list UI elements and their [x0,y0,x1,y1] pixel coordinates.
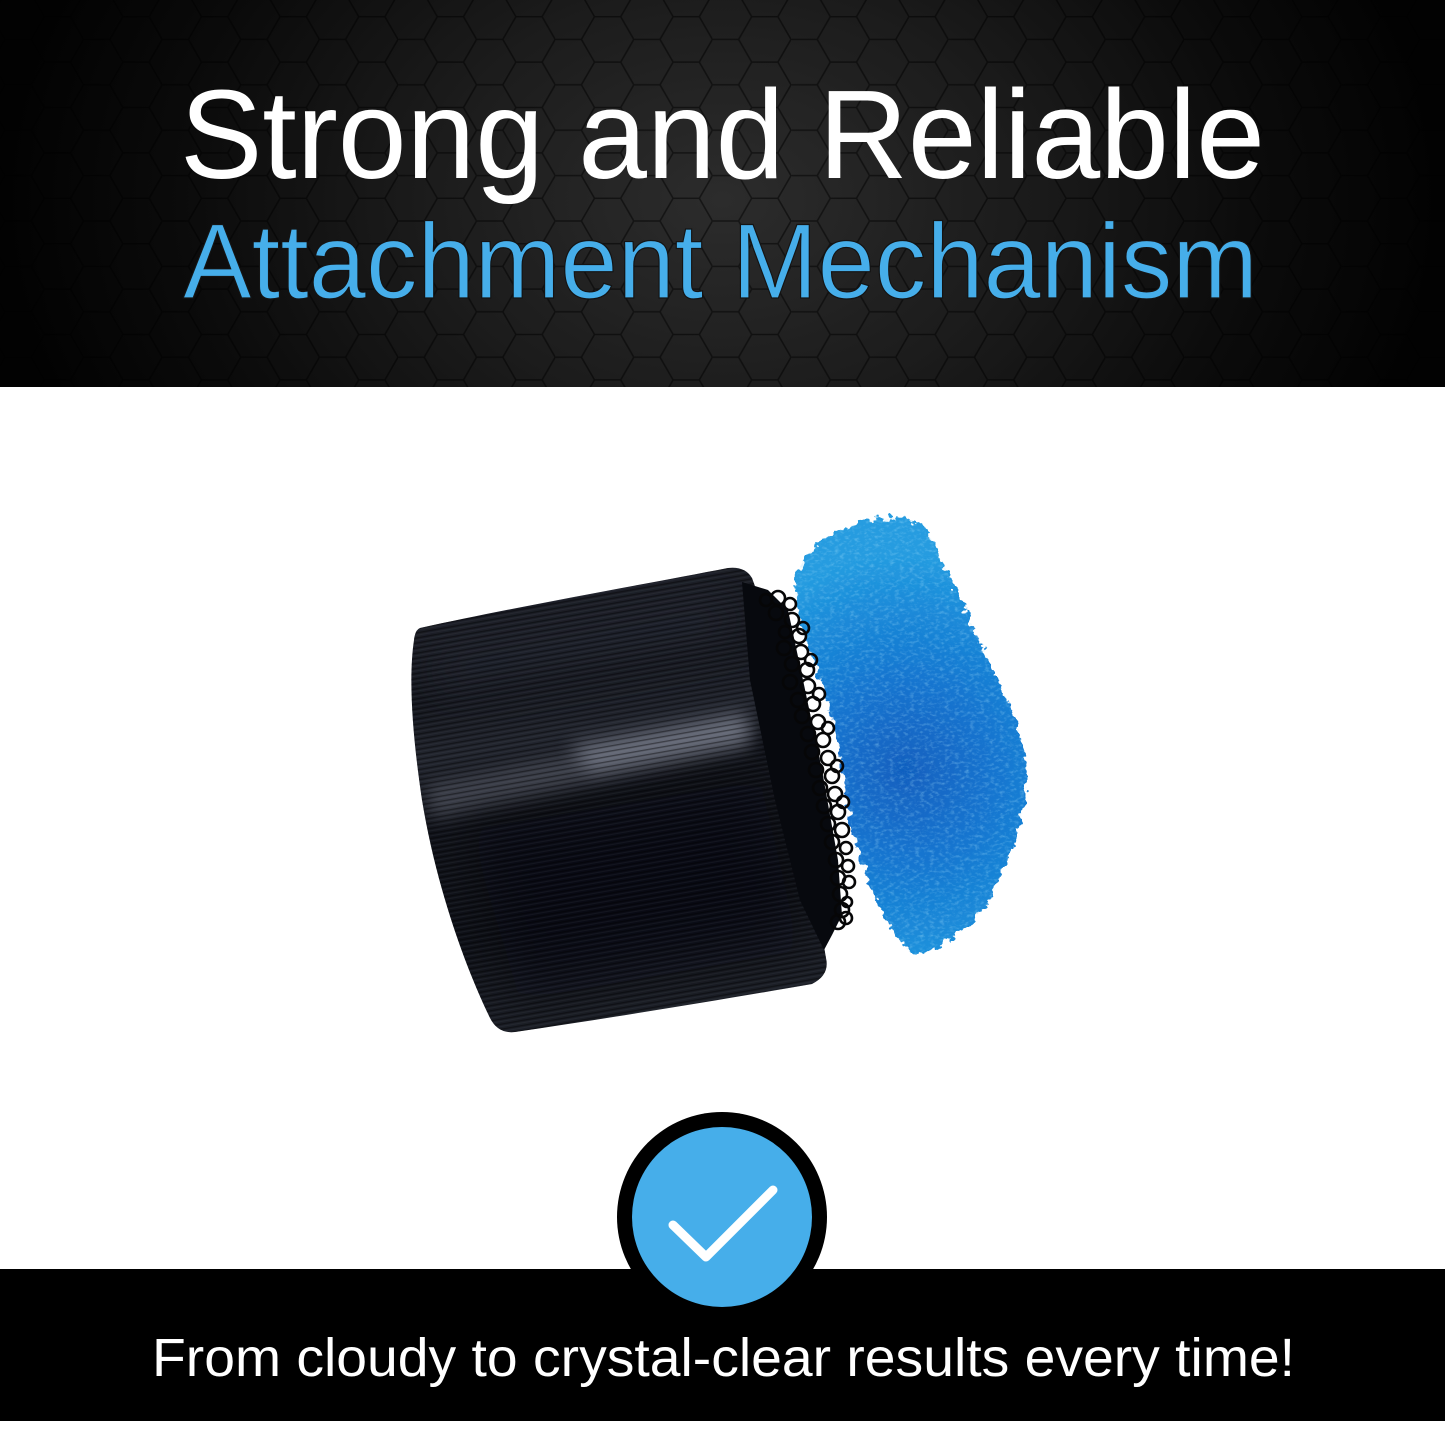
heading line 1: white title: Strong and Reliable [180,64,1265,205]
icon: check mark badge [617,1112,827,1322]
caption bar [0,1269,1445,1421]
blue filter pad [790,515,1030,960]
heading line 2: blue subtitle: Attachment Mechanism [183,201,1258,321]
product photo: cylinder with hook loops and blue filter pad [380,515,1030,1060]
header banner [0,0,1445,387]
hook loops on dark backing [742,582,855,950]
caption text: From cloudy to crystal-clear results every time! [152,1328,1295,1388]
black cylinder body [411,568,827,1032]
